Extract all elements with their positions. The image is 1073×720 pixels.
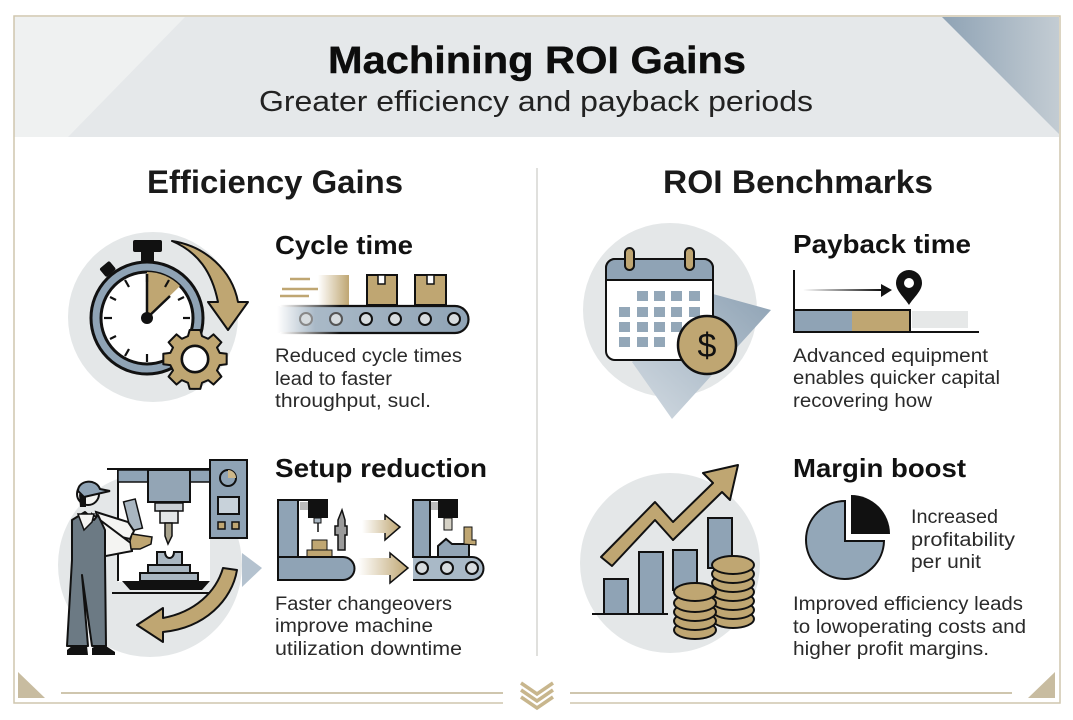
panel: setup reduction (58, 453, 487, 660)
text: margin description: higher profit margins. (793, 639, 989, 660)
text: pie label: per unit (911, 552, 982, 573)
title: Machining ROI Gains (328, 40, 746, 82)
icon: growth chart with coins (580, 465, 760, 653)
icon: worker (67, 482, 152, 655)
text: margin description (793, 594, 1026, 660)
text: pie label (911, 507, 1016, 573)
text: payback description (793, 346, 1000, 412)
text: setup reduction description: improve machine (275, 616, 433, 637)
icon: stopwatch with gear and arrow (68, 232, 248, 402)
header band (14, 17, 1059, 137)
panel: payback time (583, 223, 1000, 419)
icon: calendar with coin (583, 223, 771, 419)
heading: setup reduction: Setup reduction (275, 453, 487, 483)
icon: conveyor with boxes (277, 275, 468, 333)
heading: ROI Benchmarks: ROI Benchmarks (663, 164, 933, 200)
subtitle: Greater efficiency and payback periods (259, 86, 813, 118)
text: pie label: profitability (911, 530, 1016, 551)
text: setup reduction description: utilization downtime (275, 639, 462, 660)
icon: calendar with coin: $ (698, 327, 717, 365)
chart: payback timeline (794, 270, 979, 332)
text: setup reduction description: Faster changeovers (275, 594, 452, 615)
chart: pie (806, 495, 890, 579)
text: margin description: Improved efficiency leads (793, 594, 1023, 615)
text: payback description: recovering how (793, 391, 932, 412)
heading: margin boost: Margin boost (793, 453, 966, 483)
icon: changeover diagram (278, 500, 484, 583)
text: payback description: enables quicker capital (793, 368, 1000, 389)
text: cycle time description: lead to faster (275, 369, 393, 390)
heading: Efficiency Gains: Efficiency Gains (147, 164, 403, 200)
panel: margin boost (580, 453, 1026, 660)
text: cycle time description: throughput, sucl. (275, 391, 431, 412)
text: pie label: Increased (911, 507, 998, 528)
heading: payback time: Payback time (793, 229, 971, 259)
heading: cycle time: Cycle time (275, 230, 413, 260)
footer ornament (18, 672, 1055, 708)
panel: cycle time (68, 230, 468, 412)
text: margin description: to lowoperating costs and (793, 617, 1026, 638)
text: setup reduction description (275, 594, 462, 660)
text: payback description: Advanced equipment (793, 346, 989, 367)
text: cycle time description: Reduced cycle times (275, 346, 462, 367)
icon: machinist at CNC machine (58, 460, 262, 657)
text: cycle time description (275, 346, 462, 412)
